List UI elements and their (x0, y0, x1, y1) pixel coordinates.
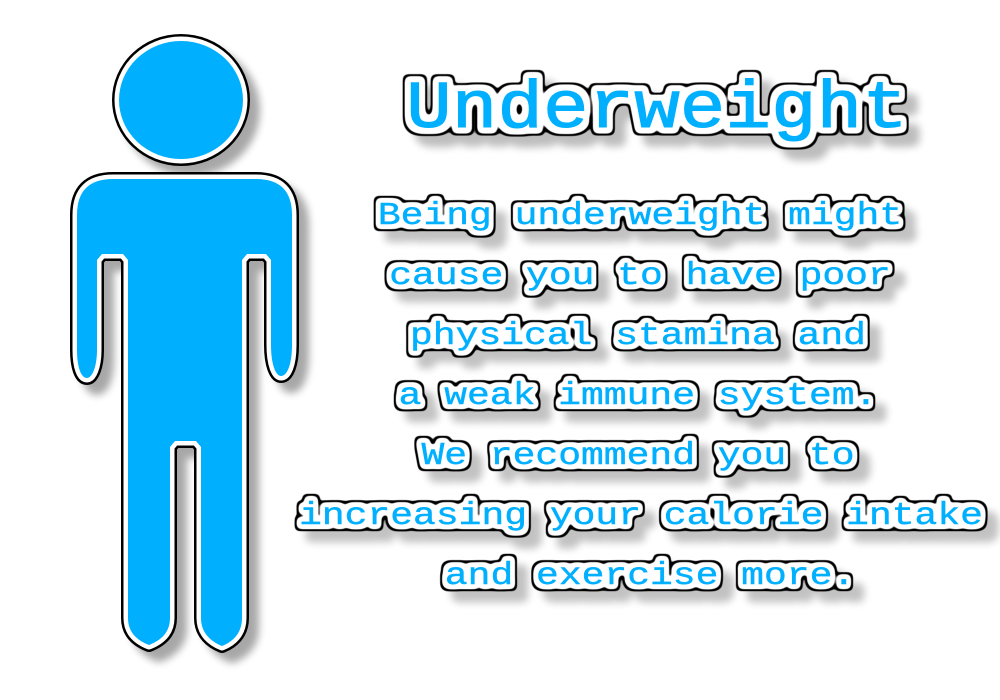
body text block (299, 199, 983, 594)
body text block: cause you to have poor (389, 259, 891, 294)
body text block: and exercise more. (445, 559, 855, 594)
figure shadow (87, 44, 302, 656)
body (77, 179, 292, 646)
body text block: We recommend you to (421, 439, 855, 474)
title: Underweight (406, 72, 908, 148)
body inner outline (77, 179, 292, 646)
body text block: a weak immune system. (399, 379, 877, 414)
body text block: increasing your calorie intake (299, 499, 983, 534)
icon: person figure (77, 34, 302, 656)
body text block: physical stamina and (410, 319, 866, 354)
body text block: Being underweight might (378, 199, 902, 234)
head (112, 34, 250, 166)
